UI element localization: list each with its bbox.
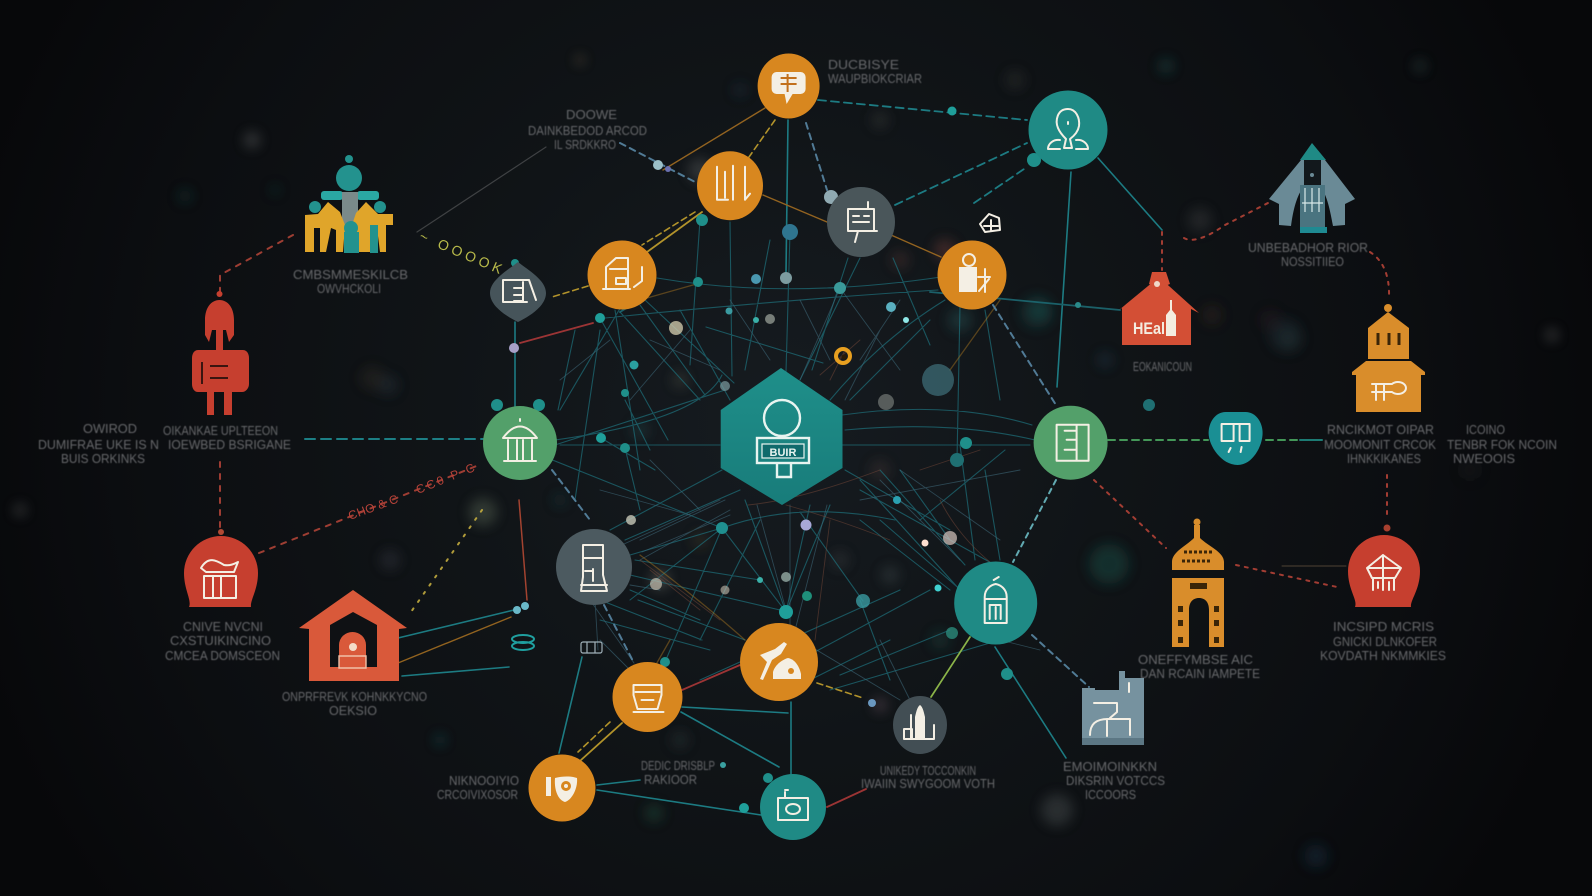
rocket house icon [1269, 143, 1355, 233]
node: teal person top right [1028, 90, 1108, 170]
label: blue-gray building: DIKSRIN VOTCCS [1066, 774, 1165, 788]
label: bottom left node: NIKNOOIYIO [449, 774, 519, 788]
label: lower center: DEDIC DRISBLP [641, 759, 715, 773]
label: rocket house: NOSSITIIEO [1281, 255, 1344, 269]
label: orange arch [1138, 653, 1260, 681]
red house right icon: HEal [1133, 319, 1165, 338]
orange-red house icon [299, 590, 407, 681]
label: orange tower: RNCIKMOT OIPAR [1327, 423, 1434, 437]
icon: speech bubble [772, 72, 806, 104]
label: blue-gray building: EMOIMOINKKN [1063, 760, 1157, 774]
label: red dome right: GNICKI DLNKOFER [1333, 635, 1437, 649]
icon: building [603, 258, 642, 289]
label: upper left of center: DAINKBEDOD ARCOD [528, 124, 647, 138]
label: red dome left [165, 620, 280, 663]
node: green right document [1034, 406, 1108, 480]
blue-gray building icon [1082, 671, 1144, 745]
node: teal lower right [954, 562, 1037, 644]
icon: camera [778, 790, 808, 820]
red dome left [184, 529, 258, 607]
label: top node [828, 58, 922, 86]
label: people group: CMBSMMESKILCB [293, 268, 408, 282]
central network web lines [540, 220, 1040, 700]
label: robot [163, 424, 291, 452]
label: top node: WAUPBIOKCRIAR [828, 72, 922, 86]
label: rocket house [1248, 241, 1368, 269]
label: upper left of center: IL SRDKKRO [554, 138, 616, 152]
node: green left pavilion [483, 406, 557, 480]
icon: capsule building [985, 577, 1007, 623]
label: far right [1447, 423, 1557, 466]
icon: board [503, 280, 536, 302]
red annotation on link [346, 460, 477, 523]
icon: tower [581, 545, 607, 591]
node: gray monitor [827, 187, 895, 257]
node: small teal shield [1209, 412, 1263, 465]
label: blue-gray building [1063, 760, 1165, 802]
central hexagon hub [721, 368, 842, 505]
icon: person [1048, 109, 1088, 149]
red dome right [1348, 524, 1420, 607]
label: rocket house: UNBEBADHOR RIOR [1248, 241, 1368, 255]
node: orange bottom left [528, 754, 596, 822]
icon: tray [634, 685, 664, 712]
label: robot left column: DUMIFRAE UKE IS N [38, 438, 159, 452]
label: robot left column: OWIROD [83, 422, 137, 436]
yellow annotation on link: ~ OOOOK [417, 228, 505, 277]
label: robot: IOEWBED BSRIGANE [168, 438, 291, 452]
icon: monitor [848, 202, 877, 242]
icon: hub monitor: BUIR [770, 447, 796, 459]
orange tower icon [1352, 304, 1425, 412]
icon: location badge [546, 776, 577, 802]
icon: document [1057, 425, 1089, 461]
small orange lock icon [836, 349, 850, 363]
label: orange tower: MOOMONIT CRCOK [1324, 438, 1437, 452]
icon: book [1222, 424, 1250, 452]
label: orange tower: IHNKKIKANES [1347, 452, 1421, 466]
node: teal bottom camera [760, 774, 826, 840]
label: blue-gray building: ICCOORS [1085, 788, 1136, 802]
label: robot left column [38, 422, 159, 466]
network connector lines [220, 100, 1389, 815]
icon: shop [201, 560, 238, 598]
red annotation on link: CC0 P C [414, 460, 477, 497]
label: people group [293, 268, 408, 296]
network junction dots [491, 106, 1155, 813]
node: building orange [588, 240, 656, 310]
label: upper left of center: DOOWE [566, 108, 617, 122]
icon: canopy [1367, 555, 1401, 590]
red annotation on link: CHO & C [346, 492, 400, 523]
label: small gray node [861, 764, 995, 791]
small glyph near gray node [581, 642, 602, 653]
node: orange middle [740, 623, 818, 701]
label: orange arch: ONEFFYMBSE AIC [1138, 653, 1253, 667]
label: red dome left: CXSTUIKINCINO [170, 634, 271, 648]
label: red dome right [1320, 620, 1446, 663]
label: orange tower [1324, 423, 1437, 466]
label: orange-red house [282, 690, 427, 718]
label: small gray node: UNIKEDY TOCCONKIN [880, 764, 976, 778]
node: gray small lower right [893, 696, 947, 754]
label: orange-red house: OEKSIO [329, 704, 377, 718]
label: red dome left: CMCEA DOMSCEON [165, 649, 280, 663]
label: far right: NWEOOIS [1453, 452, 1515, 466]
label: far right: ICOINO [1466, 423, 1505, 437]
orange arch icon [1172, 518, 1224, 647]
label: robot: OIKANKAE UPLTEEON [163, 424, 278, 438]
red robot icon [192, 291, 249, 415]
label: orange-red house: ONPRFREVK KOHNKKYCNO [282, 690, 427, 704]
label: small gray node: IWAIIN SWYGOOM VOTH [861, 777, 995, 791]
small white floating icon [980, 214, 1000, 232]
icon: bars [717, 166, 750, 200]
label: red house right: EOKANICOUN [1133, 360, 1192, 374]
label: far right: TENBR FOK NCOIN [1447, 438, 1557, 452]
label: orange arch: DAN RCAIN IAMPETE [1140, 667, 1260, 681]
node: gray shield left [490, 262, 546, 322]
node: person orange [938, 240, 1006, 310]
node: orange lower left [612, 662, 682, 732]
label: people group: OWVHCKOLI [317, 282, 381, 296]
red house right icon [1119, 272, 1199, 345]
label: red dome left: CNIVE NVCNI [183, 620, 263, 634]
label: lower center: RAKIOOR [644, 773, 697, 787]
label: robot left column: BUIS ORKINKS [61, 452, 145, 466]
node: gray lower left tower [556, 529, 632, 605]
people group icon [305, 155, 393, 253]
small faint teal glyph [512, 635, 534, 650]
label: red dome right: KOVDATH NKMMKIES [1320, 649, 1446, 663]
icon: person with tool [959, 254, 990, 292]
icon: bottle hand [904, 705, 934, 739]
icon: tools [760, 642, 801, 680]
node: chart bars [697, 151, 763, 220]
label: bottom left node: CRCOIVIXOSOR [437, 788, 518, 802]
label: lower center [641, 759, 715, 787]
label: upper left of center [528, 108, 647, 152]
label: red dome right: INCSIPD MCRIS [1333, 620, 1434, 634]
node: top speech bubble [758, 54, 820, 118]
label: top node: DUCBISYE [828, 58, 899, 72]
icon: pavilion [503, 419, 537, 461]
label: bottom left node [437, 774, 519, 802]
